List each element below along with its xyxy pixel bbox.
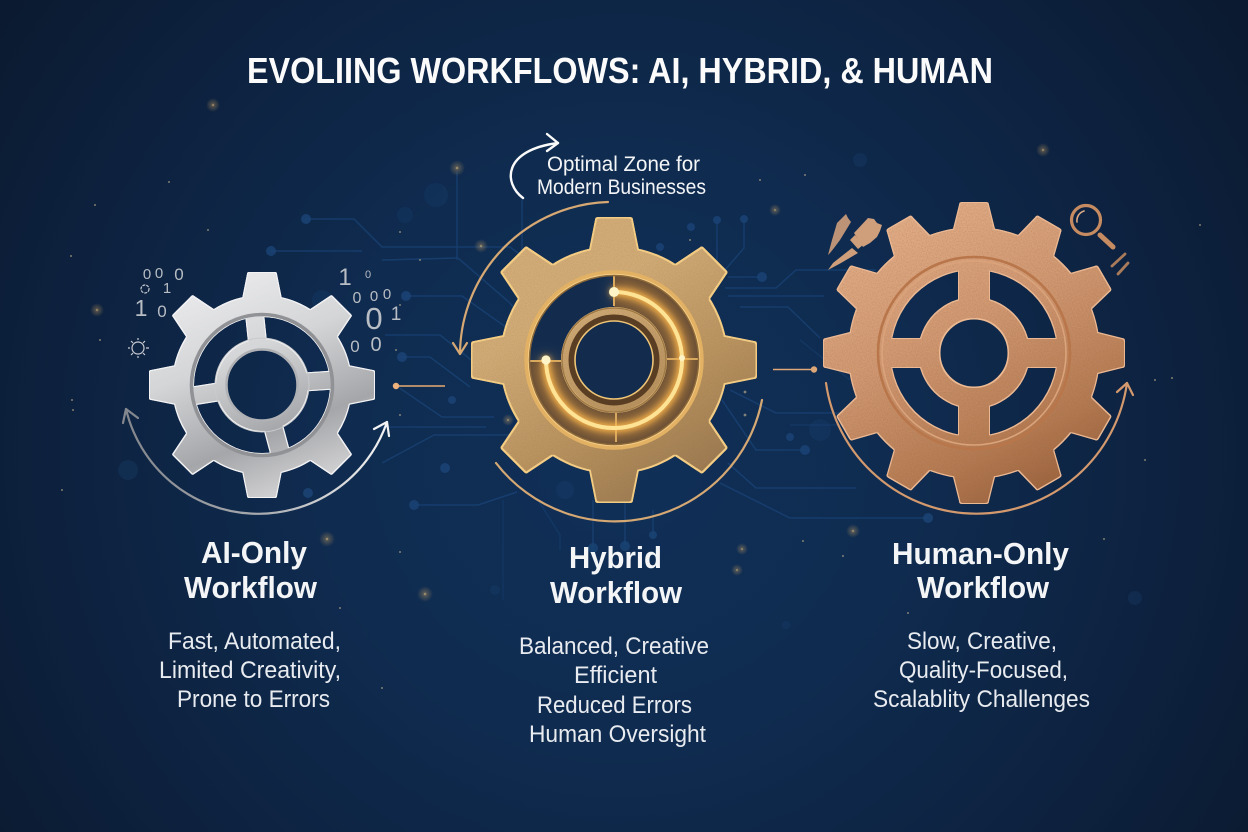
binary digits and small icons: 1	[135, 295, 147, 321]
title: EVOLIING WORKFLOWS: AI, HYBRID, & HUMAN	[247, 50, 993, 91]
bokeh and sparkles	[61, 98, 1201, 689]
description: Limited Creativity,	[159, 657, 341, 684]
heading	[892, 536, 1070, 605]
circuit board lines	[271, 172, 928, 600]
description	[159, 628, 341, 713]
panel: AI-only workflow	[123, 262, 445, 713]
gold rotation arrows	[453, 202, 762, 521]
binary digits and small icons: 0	[383, 286, 391, 303]
panel: human-only workflow	[818, 197, 1133, 713]
binary digits and small icons: 0	[157, 302, 167, 321]
description	[519, 633, 709, 748]
binary digits and small icons: 0	[365, 269, 371, 281]
heading: Workflow	[184, 570, 318, 605]
panel: hybrid workflow	[453, 134, 817, 748]
heading: Workflow	[917, 570, 1050, 605]
description	[873, 628, 1090, 713]
icon: magnifying glass	[1072, 206, 1128, 274]
binary digits and small icons: 1	[391, 304, 401, 325]
connector	[393, 383, 445, 389]
binary digits and small icons	[128, 264, 401, 358]
binary digits and small icons: 0	[350, 337, 360, 356]
binary digits and small icons: 0	[174, 265, 184, 284]
heading: Hybrid	[569, 540, 662, 575]
heading: Workflow	[550, 575, 683, 610]
binary digits and small icons: 0	[353, 290, 362, 307]
description: Efficient	[574, 662, 657, 689]
heading: Human-Only	[892, 536, 1070, 571]
binary digits and small icons: 0	[365, 301, 383, 336]
connector	[773, 366, 817, 373]
heading: AI-Only	[201, 535, 308, 570]
binary digits and small icons: 0	[155, 265, 163, 282]
binary digits and small icons: 0	[370, 288, 378, 305]
copper gear	[818, 197, 1130, 509]
glowing arc	[541, 287, 685, 428]
copper rotation arrow	[826, 383, 1133, 514]
callout arrow	[511, 134, 558, 198]
binary digits and small icons: 1	[163, 280, 171, 297]
binary digits and small icons: 1	[338, 264, 352, 291]
callout text: Modern Businesses	[537, 176, 706, 199]
heading	[550, 540, 683, 610]
callout text	[537, 153, 706, 199]
binary digits and small icons: 0	[370, 334, 382, 356]
circuit nodes	[266, 214, 933, 553]
description: Quality-Focused,	[899, 657, 1068, 684]
silver rotation arrow	[123, 409, 389, 514]
description: Fast, Automated,	[168, 628, 341, 655]
description: Scalablity Challenges	[873, 686, 1090, 713]
gold gear	[465, 210, 765, 510]
callout text: Optimal Zone for	[547, 153, 700, 176]
description: Reduced Errors	[537, 692, 692, 719]
binary digits and small icons: 0	[143, 266, 151, 283]
description: Human Oversight	[529, 721, 706, 748]
description: Prone to Errors	[177, 686, 330, 713]
icon: paint brush	[828, 214, 882, 270]
heading	[184, 535, 318, 605]
description: Slow, Creative,	[907, 628, 1057, 655]
description: Balanced, Creative	[519, 633, 709, 660]
silver gear	[149, 272, 375, 498]
